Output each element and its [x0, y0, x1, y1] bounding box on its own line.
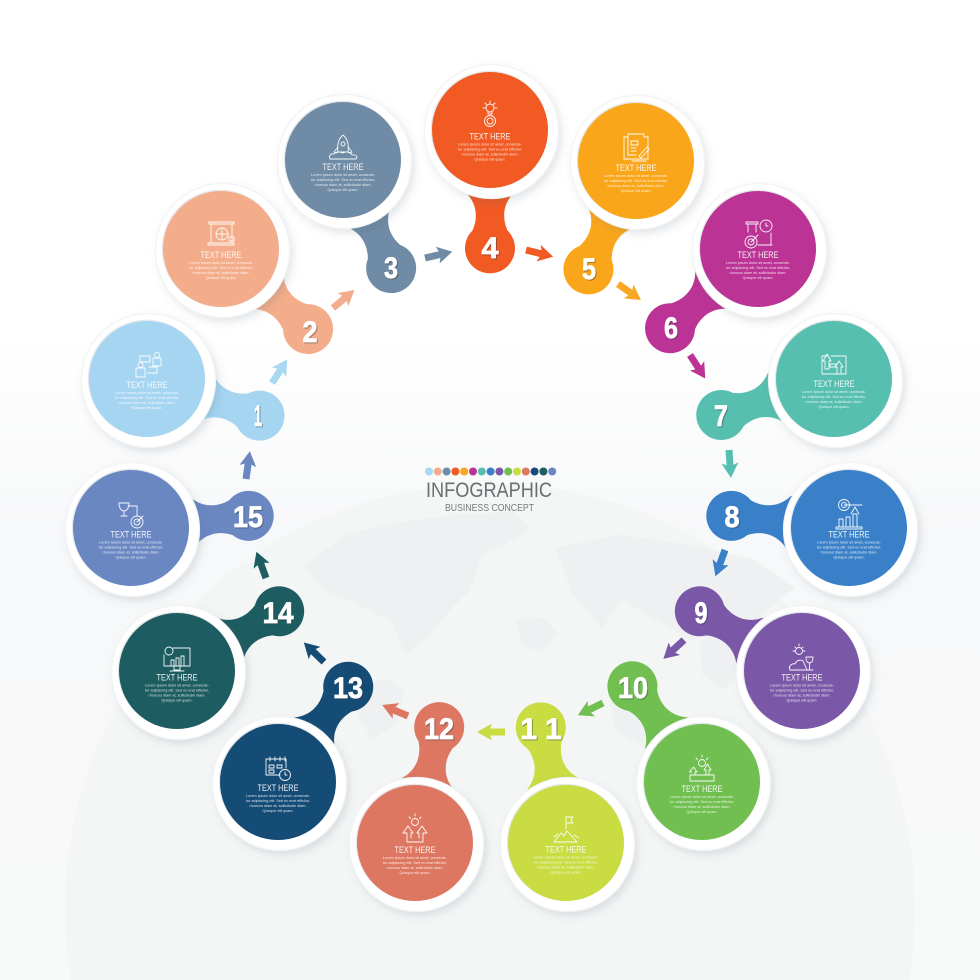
- body text: Lorem ipsum dolor sit amet, consecte-: [458, 142, 523, 146]
- body text: Quisque elit quam.: [262, 808, 294, 813]
- body text: rhoncus diam at, sollicitudin diam.: [102, 550, 160, 554]
- step 9: [665, 576, 870, 740]
- body text: Lorem ipsum dolor sit amet, consecte-: [802, 389, 867, 394]
- icon: mountain flag: [554, 817, 579, 842]
- title text: INFOGRAPHIC: [426, 479, 552, 502]
- icon: folder with arrows: [822, 354, 846, 374]
- heading: TEXT HERE: [814, 378, 854, 389]
- body text: tur adipiscing elit. Sed eu erat efficitur,: [189, 265, 253, 270]
- body text: tur adipiscing elit. Sed eu erat efficitur,: [145, 688, 209, 692]
- number: 12: [424, 713, 454, 746]
- body text: rhoncus diam at, sollicitudin diam.: [192, 270, 250, 275]
- body text: Lorem ipsum dolor sit amet, consecte-: [604, 173, 669, 178]
- heading: TEXT HERE: [616, 162, 656, 173]
- icon: documents and pen: [624, 134, 649, 161]
- body text: tur adipiscing elit. Sed eu erat efficitur,: [458, 146, 522, 152]
- heading: TEXT HERE: [738, 249, 778, 260]
- number: 8: [724, 501, 740, 534]
- body text: rhoncus diam at, sollicitudin diam.: [730, 270, 786, 275]
- number: 5: [582, 253, 596, 286]
- body text: tur adipiscing elit. Sed eu erat efficitur,: [802, 394, 866, 399]
- body text: [670, 794, 735, 814]
- body text: rhoncus diam at, sollicitudin diam.: [820, 550, 878, 554]
- body text: tur adipiscing elit. Sed eu erat efficitur,: [246, 798, 310, 803]
- body text: Lorem ipsum dolor sit amet, consecte-: [115, 390, 180, 395]
- body text: Lorem ipsum dolor sit amet, consecte-: [770, 682, 835, 688]
- body text: Lorem ipsum dolor sit amet, consecte-: [311, 172, 376, 177]
- step 7: [690, 314, 902, 448]
- body text: rhoncus diam at, sollicitudin diam.: [386, 865, 444, 870]
- body text: Quisque elit quam.: [474, 156, 506, 162]
- body text: [802, 389, 867, 409]
- body text: tur adipiscing elit. Sed eu erat efficitur,: [670, 799, 734, 804]
- icon: idea on podium: [690, 755, 714, 781]
- body text: rhoncus diam at, sollicitudin diam.: [538, 864, 594, 870]
- heading: TEXT HERE: [200, 249, 242, 260]
- body text: Quisque elit quam.: [834, 554, 864, 560]
- heading: TEXT HERE: [394, 844, 436, 855]
- number: 13: [333, 672, 363, 705]
- icon: lightbulb and clock: [483, 101, 497, 126]
- icon: people chat: [136, 352, 161, 377]
- step 5: [555, 96, 704, 303]
- number: 7: [714, 400, 728, 433]
- heading: TEXT HERE: [546, 844, 586, 854]
- body text: tur adipiscing elit. Sed eu erat efficitur,: [726, 265, 790, 270]
- icon: idea, cloud and trophy: [789, 644, 813, 670]
- body text: tur adipiscing elit. Sed eu erat efficitur,: [99, 544, 163, 550]
- body text: tur adipiscing elit. Sed eu erat efficitur,: [770, 688, 834, 692]
- step 4: [424, 64, 558, 273]
- arrows between steps: [238, 242, 739, 740]
- body text: Quisque elit quam.: [206, 275, 236, 280]
- number: 6: [664, 312, 678, 345]
- body text: rhoncus diam at, sollicitudin diam.: [148, 692, 206, 698]
- body text: rhoncus diam at, sollicitudin diam.: [250, 803, 306, 808]
- body text: [311, 172, 376, 192]
- body text: rhoncus diam at, sollicitudin diam.: [462, 152, 518, 156]
- body text: Quisque elit quam.: [328, 187, 358, 192]
- body text: Quisque elit quam.: [742, 275, 774, 280]
- heading: TEXT HERE: [110, 528, 152, 540]
- world map: [305, 512, 795, 745]
- icon: trophy and target: [119, 503, 143, 528]
- body text: Lorem ipsum dolor sit amet, consecte-: [189, 260, 254, 265]
- heading: TEXT HERE: [258, 782, 298, 793]
- body text: Quisque elit quam.: [818, 404, 850, 409]
- icon: presentation board: [208, 222, 234, 245]
- step 1: 1: [254, 400, 262, 433]
- number: 3: [384, 252, 398, 285]
- body text: [99, 540, 164, 560]
- body text: Quisque elit quam.: [400, 870, 430, 875]
- body text: rhoncus diam at, sollicitudin diam.: [608, 183, 664, 188]
- number: 4: [482, 232, 499, 265]
- body text: tur adipiscing elit. Sed eu erat efficitur,: [534, 860, 598, 864]
- body text: [145, 682, 210, 702]
- icon: monitor with chart: [164, 647, 190, 671]
- body text: tur adipiscing elit. Sed eu erat efficitur,: [604, 178, 668, 183]
- body text: [246, 793, 311, 813]
- body text: Quisque elit quam.: [786, 698, 818, 702]
- step 13: [212, 651, 384, 850]
- body text: Lorem ipsum dolor sit amet, consecte-: [145, 682, 210, 688]
- step 14: [112, 576, 314, 740]
- icon: target and bar chart: [836, 500, 862, 529]
- body text: Lorem ipsum dolor sit amet, consecte-: [534, 854, 599, 860]
- globe backdrop: [65, 484, 915, 980]
- body text: tur adipiscing elit. Sed eu erat efficitur,: [115, 395, 179, 400]
- body text: [189, 260, 254, 280]
- body text: Quisque elit quam.: [620, 188, 652, 193]
- body text: Lorem ipsum dolor sit amet, consecte-: [817, 540, 882, 544]
- step 8: [704, 462, 918, 596]
- number: 9: [694, 597, 708, 630]
- number: 2: [302, 316, 318, 349]
- step 6: [634, 184, 826, 364]
- icon: idea with up arrows: [403, 814, 427, 842]
- body text: Quisque elit quam.: [550, 870, 582, 874]
- body text: rhoncus diam at, sollicitudin diam.: [118, 400, 176, 405]
- step 11: [500, 697, 634, 912]
- step 3: [278, 94, 425, 302]
- body text: rhoncus diam at, sollicitudin diam.: [314, 182, 372, 187]
- body text: Quisque elit quam.: [162, 698, 192, 702]
- body text: [770, 682, 835, 702]
- icon: target and clock: [745, 220, 772, 248]
- number: 10: [618, 672, 648, 705]
- body text: Lorem ipsum dolor sit amet, consecte-: [246, 793, 311, 798]
- icon: rocket: [329, 135, 357, 159]
- heading: TEXT HERE: [126, 379, 168, 390]
- body text: [604, 173, 669, 193]
- heading: TEXT HERE: [322, 161, 364, 172]
- number: 14: [262, 597, 294, 630]
- subtitle text: BUSINESS CONCEPT: [445, 502, 534, 514]
- body text: tur adipiscing elit. Sed eu erat efficitur,: [817, 544, 881, 550]
- body text: Quisque elit quam.: [116, 554, 146, 560]
- step 2: [156, 184, 344, 365]
- heading: TEXT HERE: [156, 672, 198, 682]
- central title block: [425, 468, 556, 514]
- colour dots row: [425, 468, 556, 476]
- body text: tur adipiscing elit. Sed eu erat efficitur,: [383, 860, 447, 865]
- body text: Quisque elit quam.: [132, 405, 162, 410]
- step 15: [66, 462, 276, 596]
- body text: [383, 855, 448, 875]
- body text: [726, 260, 791, 280]
- body text: [115, 390, 180, 410]
- body text: tur adipiscing elit. Sed eu erat efficitur,: [311, 177, 375, 182]
- body text: [458, 142, 523, 162]
- body text: Lorem ipsum dolor sit amet, consecte-: [670, 794, 735, 799]
- step 1: [82, 314, 291, 448]
- step 10: [597, 651, 770, 850]
- body text: rhoncus diam at, sollicitudin diam.: [774, 692, 830, 698]
- body text: [817, 540, 882, 560]
- number: 15: [233, 501, 263, 534]
- body text: rhoncus diam at, sollicitudin diam.: [674, 804, 730, 809]
- body text: Lorem ipsum dolor sit amet, consecte-: [383, 855, 448, 860]
- body text: Lorem ipsum dolor sit amet, consecte-: [726, 260, 791, 265]
- heading: TEXT HERE: [470, 130, 510, 142]
- step 12: [350, 697, 484, 912]
- heading: TEXT HERE: [782, 672, 822, 682]
- body text: Quisque elit quam.: [686, 809, 718, 814]
- icon: calendar and clock: [266, 757, 290, 780]
- body text: [534, 854, 599, 874]
- body text: rhoncus diam at, sollicitudin diam.: [806, 399, 862, 404]
- number: 11: [520, 713, 570, 746]
- body text: Lorem ipsum dolor sit amet, consecte-: [99, 540, 164, 544]
- heading: TEXT HERE: [828, 528, 870, 540]
- heading: TEXT HERE: [682, 783, 722, 794]
